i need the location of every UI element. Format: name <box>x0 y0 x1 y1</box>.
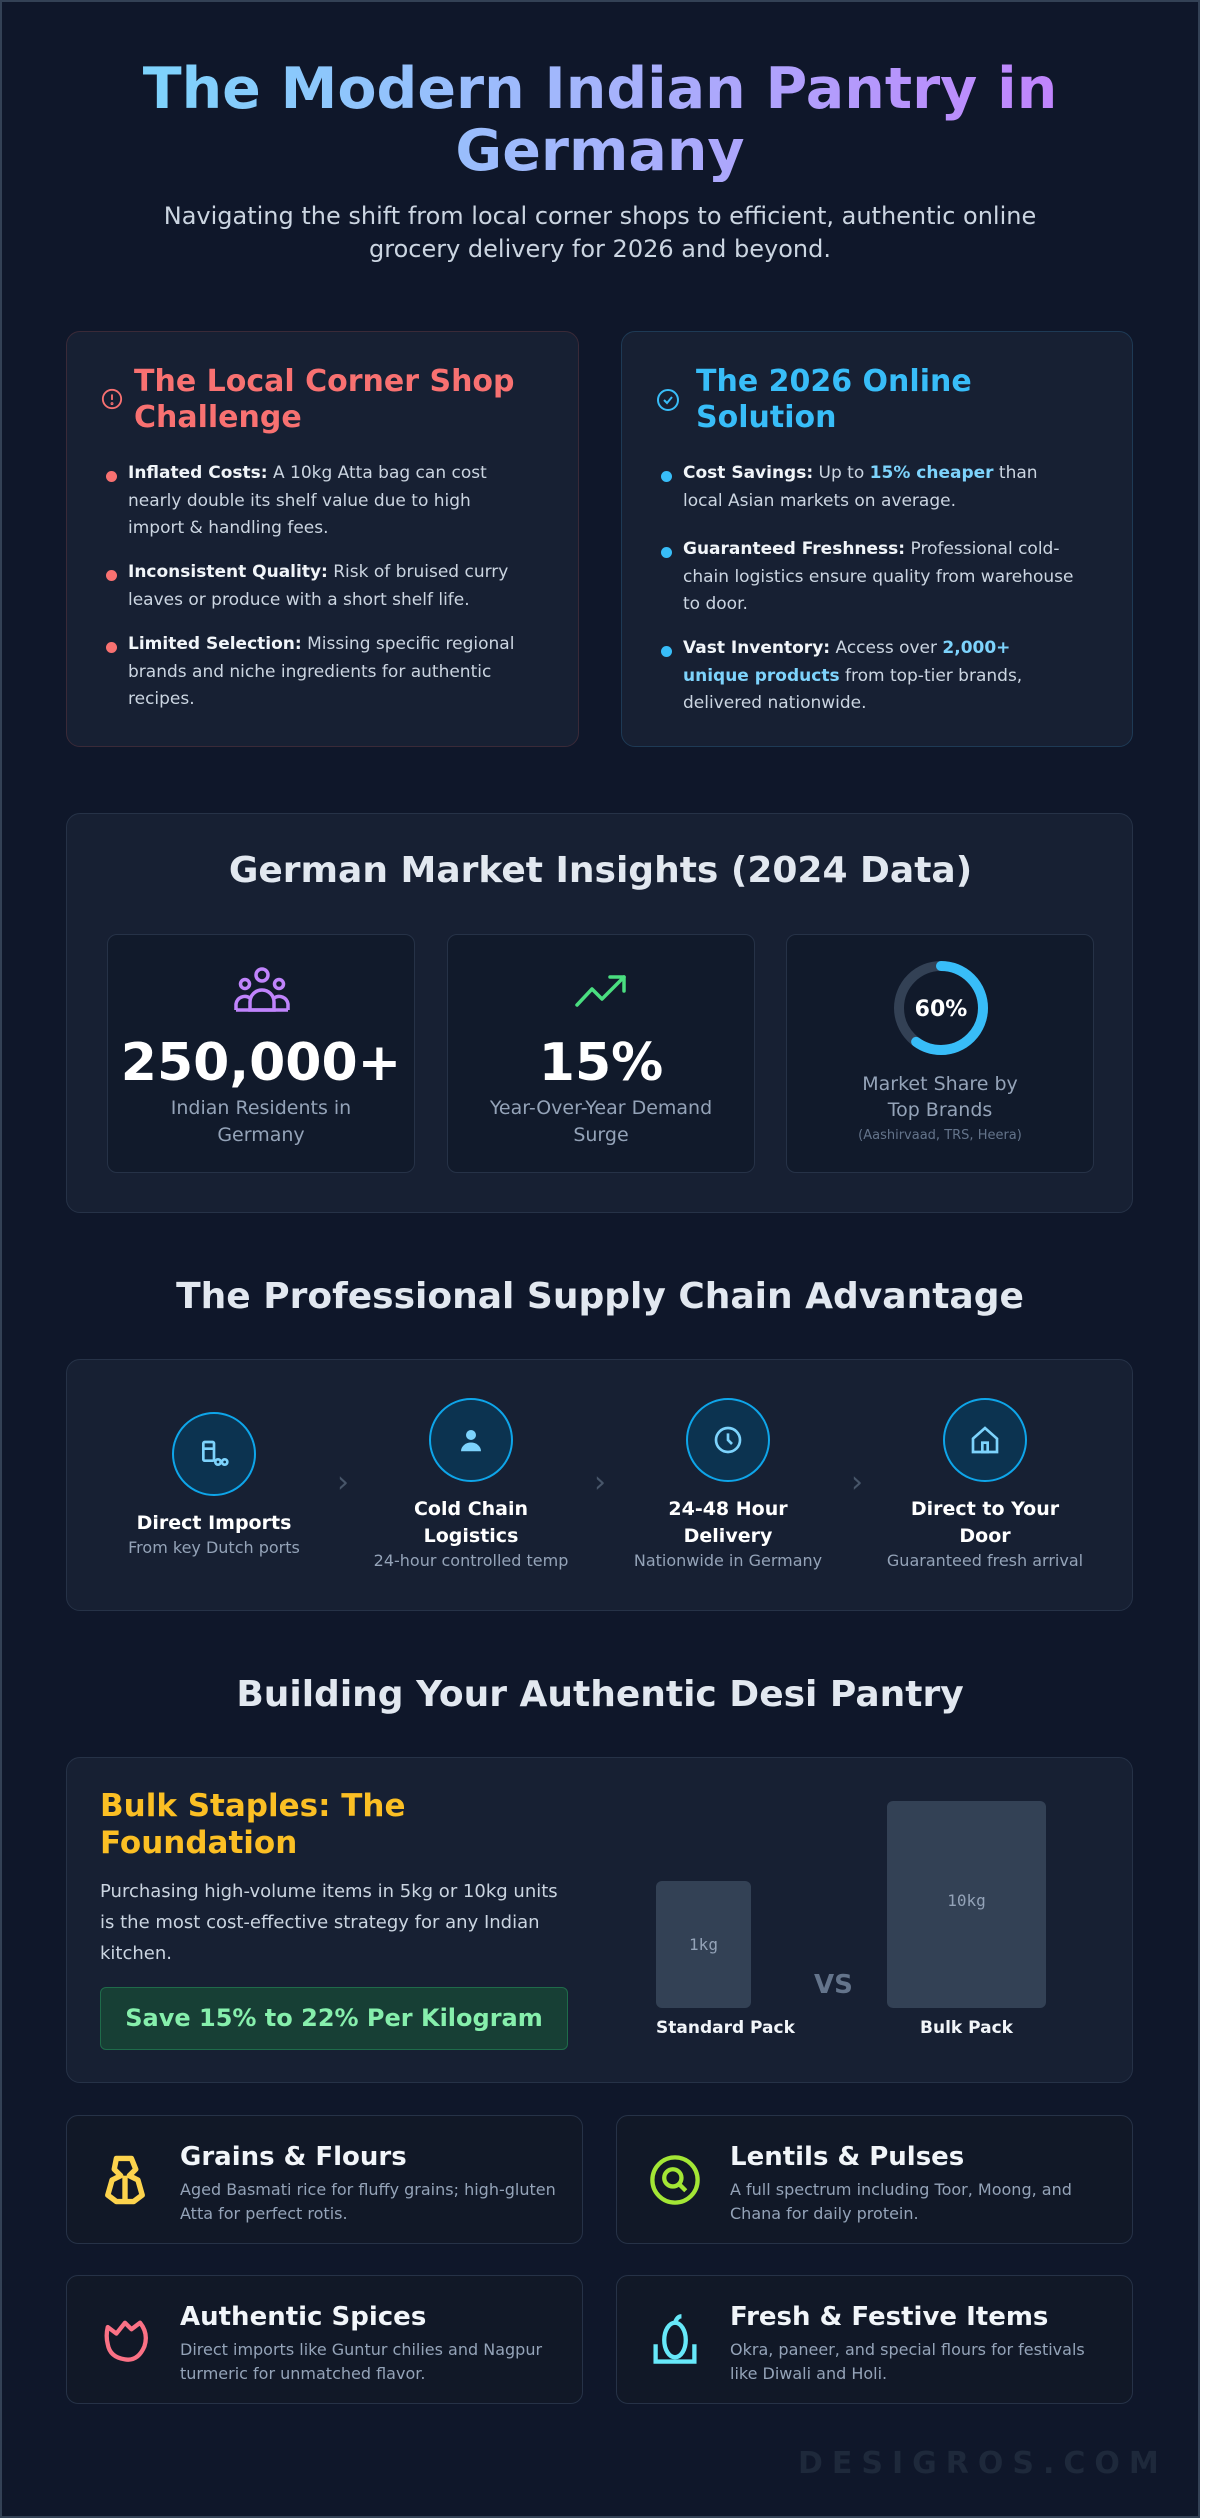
step: door <box>887 1398 1083 1570</box>
card: grains: Aged Basmati rice for fluffy grains; high-gluten <box>180 2180 556 2199</box>
step: direct imports: Direct Imports <box>137 1512 291 1534</box>
step: delivery: 24-48 Hour <box>668 1498 788 1520</box>
card: grains: Atta for perfect rotis. <box>180 2204 348 2223</box>
bullet list: Vast Inventory: Access over 2,000+ <box>683 638 1010 658</box>
stat: residents: 250,000+ <box>121 1033 401 1093</box>
heading: The 2026 Online <box>696 364 972 399</box>
card: fresh: like Diwali and Holi. <box>730 2364 887 2383</box>
bullet list: Limited Selection: Missing specific regional brands and niche ingredients for authentic recipes. <box>128 634 514 709</box>
callout: savings <box>100 1987 568 2050</box>
stat: market share donut <box>786 934 1094 1173</box>
stat: market share donut: (Aashirvaad, TRS, Heera) <box>858 1128 1022 1143</box>
donut chart <box>894 961 988 1055</box>
bullet list: unique products from top-tier brands, <box>683 666 1022 686</box>
card: spices: Authentic Spices <box>180 2302 426 2332</box>
bullet list: Inconsistent Quality: Risk of bruised curry leaves or produce with a short shelf life. <box>128 562 508 610</box>
heading: desi pantry: Building Your Authentic Desi Pantry <box>236 1674 964 1715</box>
title <box>143 56 1057 184</box>
step: cold chain <box>374 1398 568 1570</box>
heading: Challenge <box>134 400 302 435</box>
heading: Solution <box>696 400 836 435</box>
step: direct imports <box>128 1412 300 1557</box>
heading: Bulk Staples: The <box>100 1788 406 1824</box>
heading <box>100 1788 406 1861</box>
bullet list: delivered nationwide. <box>683 693 867 713</box>
icon: check <box>657 389 679 411</box>
heading: Foundation <box>100 1825 297 1861</box>
heading: supply chain: The Professional Supply Chain Advantage <box>176 1276 1024 1317</box>
step: door: Guaranteed fresh arrival <box>887 1551 1083 1570</box>
step: door: Door <box>959 1525 1011 1547</box>
stat: demand: 15% <box>539 1033 663 1093</box>
card: fresh: Fresh & Festive Items <box>730 2302 1048 2332</box>
bullet list: chain logistics ensure quality from warehouse <box>683 566 1073 586</box>
title: Germany <box>455 118 745 184</box>
text <box>100 1881 558 1964</box>
card: lentils <box>616 2115 1133 2244</box>
text: is the most cost-effective strategy for any Indian kitchen. <box>100 1912 540 1964</box>
heading: German Market Insights (2024 Data) <box>229 850 972 891</box>
icon: festive <box>653 2314 697 2364</box>
stat: demand: Year-Over-Year Demand Surge <box>490 1097 712 1146</box>
step: direct imports: From key Dutch ports <box>128 1538 300 1557</box>
bullet list: Inflated Costs: A 10kg Atta bag can cost <box>128 463 487 483</box>
arrow: › <box>337 1465 349 1500</box>
step: delivery: Delivery <box>684 1525 772 1547</box>
title: The Modern Indian Pantry in <box>143 56 1057 122</box>
stat: residents <box>107 934 415 1173</box>
bullet list <box>661 463 1073 713</box>
chart: pack comparison: VS <box>814 1970 853 2000</box>
card: spices: turmeric for unmatched flavor. <box>180 2364 425 2383</box>
panel: local corner shop challenge <box>66 331 579 747</box>
subtitle <box>164 202 1036 263</box>
subtitle: grocery delivery for 2026 and beyond. <box>369 235 831 263</box>
bullet list: Guaranteed Freshness: Professional cold- <box>683 539 1059 559</box>
icon: trend <box>575 975 626 1007</box>
step: cold chain: 24-hour controlled temp <box>374 1551 568 1570</box>
icon: alert <box>102 388 122 410</box>
card: lentils: A full spectrum including Toor, Moong, and <box>730 2180 1072 2199</box>
bullet list: local Asian markets on average. <box>683 490 956 510</box>
chart: pack comparison: Bulk Pack <box>920 2018 1013 2038</box>
step: door: Direct to Your <box>911 1498 1059 1520</box>
arrow: › <box>594 1465 606 1500</box>
donut chart: 60% <box>915 997 967 1022</box>
subtitle: Navigating the shift from local corner shops to efficient, authentic online <box>164 202 1036 230</box>
heading <box>134 364 515 435</box>
heading <box>696 364 972 435</box>
icon: people <box>234 967 290 1012</box>
stat: residents: Indian Residents in Germany <box>171 1097 351 1146</box>
panel: market insights <box>66 813 1133 1213</box>
icon: lentil <box>650 2155 700 2205</box>
card: fresh: Okra, paneer, and special flours for festivals <box>730 2340 1085 2359</box>
chart: pack comparison <box>656 1801 1046 2038</box>
step: delivery: Nationwide in Germany <box>634 1551 822 1570</box>
chart: pack comparison: 10kg <box>947 1891 986 1910</box>
icon: wheat <box>105 2156 145 2204</box>
arrow: › <box>851 1465 863 1500</box>
bullet list: to door. <box>683 594 748 614</box>
stat: demand <box>447 934 755 1173</box>
bullet list: nearly double its shelf value due to high <box>128 490 471 510</box>
panel: supply chain steps <box>66 1359 1133 1611</box>
card: spices <box>66 2275 583 2404</box>
bullet list: import & handling fees. <box>128 518 329 538</box>
step: delivery <box>634 1398 822 1570</box>
card: fresh <box>616 2275 1133 2404</box>
card: lentils: Lentils & Pulses <box>730 2142 964 2172</box>
card: grains <box>66 2115 583 2244</box>
card: lentils: Chana for daily protein. <box>730 2204 919 2223</box>
chart: pack comparison: 1kg <box>689 1935 718 1954</box>
card: grains: Grains & Flours <box>180 2142 407 2172</box>
heading: The Local Corner Shop <box>134 364 515 399</box>
bullet list: Cost Savings: Up to 15% cheaper than <box>683 463 1038 483</box>
watermark: DESIGROS.COM <box>798 2446 1168 2481</box>
panel: 2026 online solution <box>621 331 1133 747</box>
step: cold chain: Cold Chain <box>414 1498 528 1520</box>
stat: market share donut: Top Brands <box>888 1099 992 1121</box>
card: spices: Direct imports like Guntur chilies and Nagpur <box>180 2340 542 2359</box>
panel: bulk staples <box>66 1757 1133 2083</box>
step: cold chain: Logistics <box>424 1525 518 1547</box>
text: Purchasing high-volume items in 5kg or 10kg units <box>100 1881 558 1902</box>
stat: market share donut: Market Share by <box>862 1073 1018 1095</box>
bullet list <box>106 463 514 709</box>
icon: spice <box>104 2320 148 2362</box>
callout: savings: Save 15% to 22% Per Kilogram <box>125 2004 543 2032</box>
chart: pack comparison: Standard Pack <box>656 2018 795 2038</box>
